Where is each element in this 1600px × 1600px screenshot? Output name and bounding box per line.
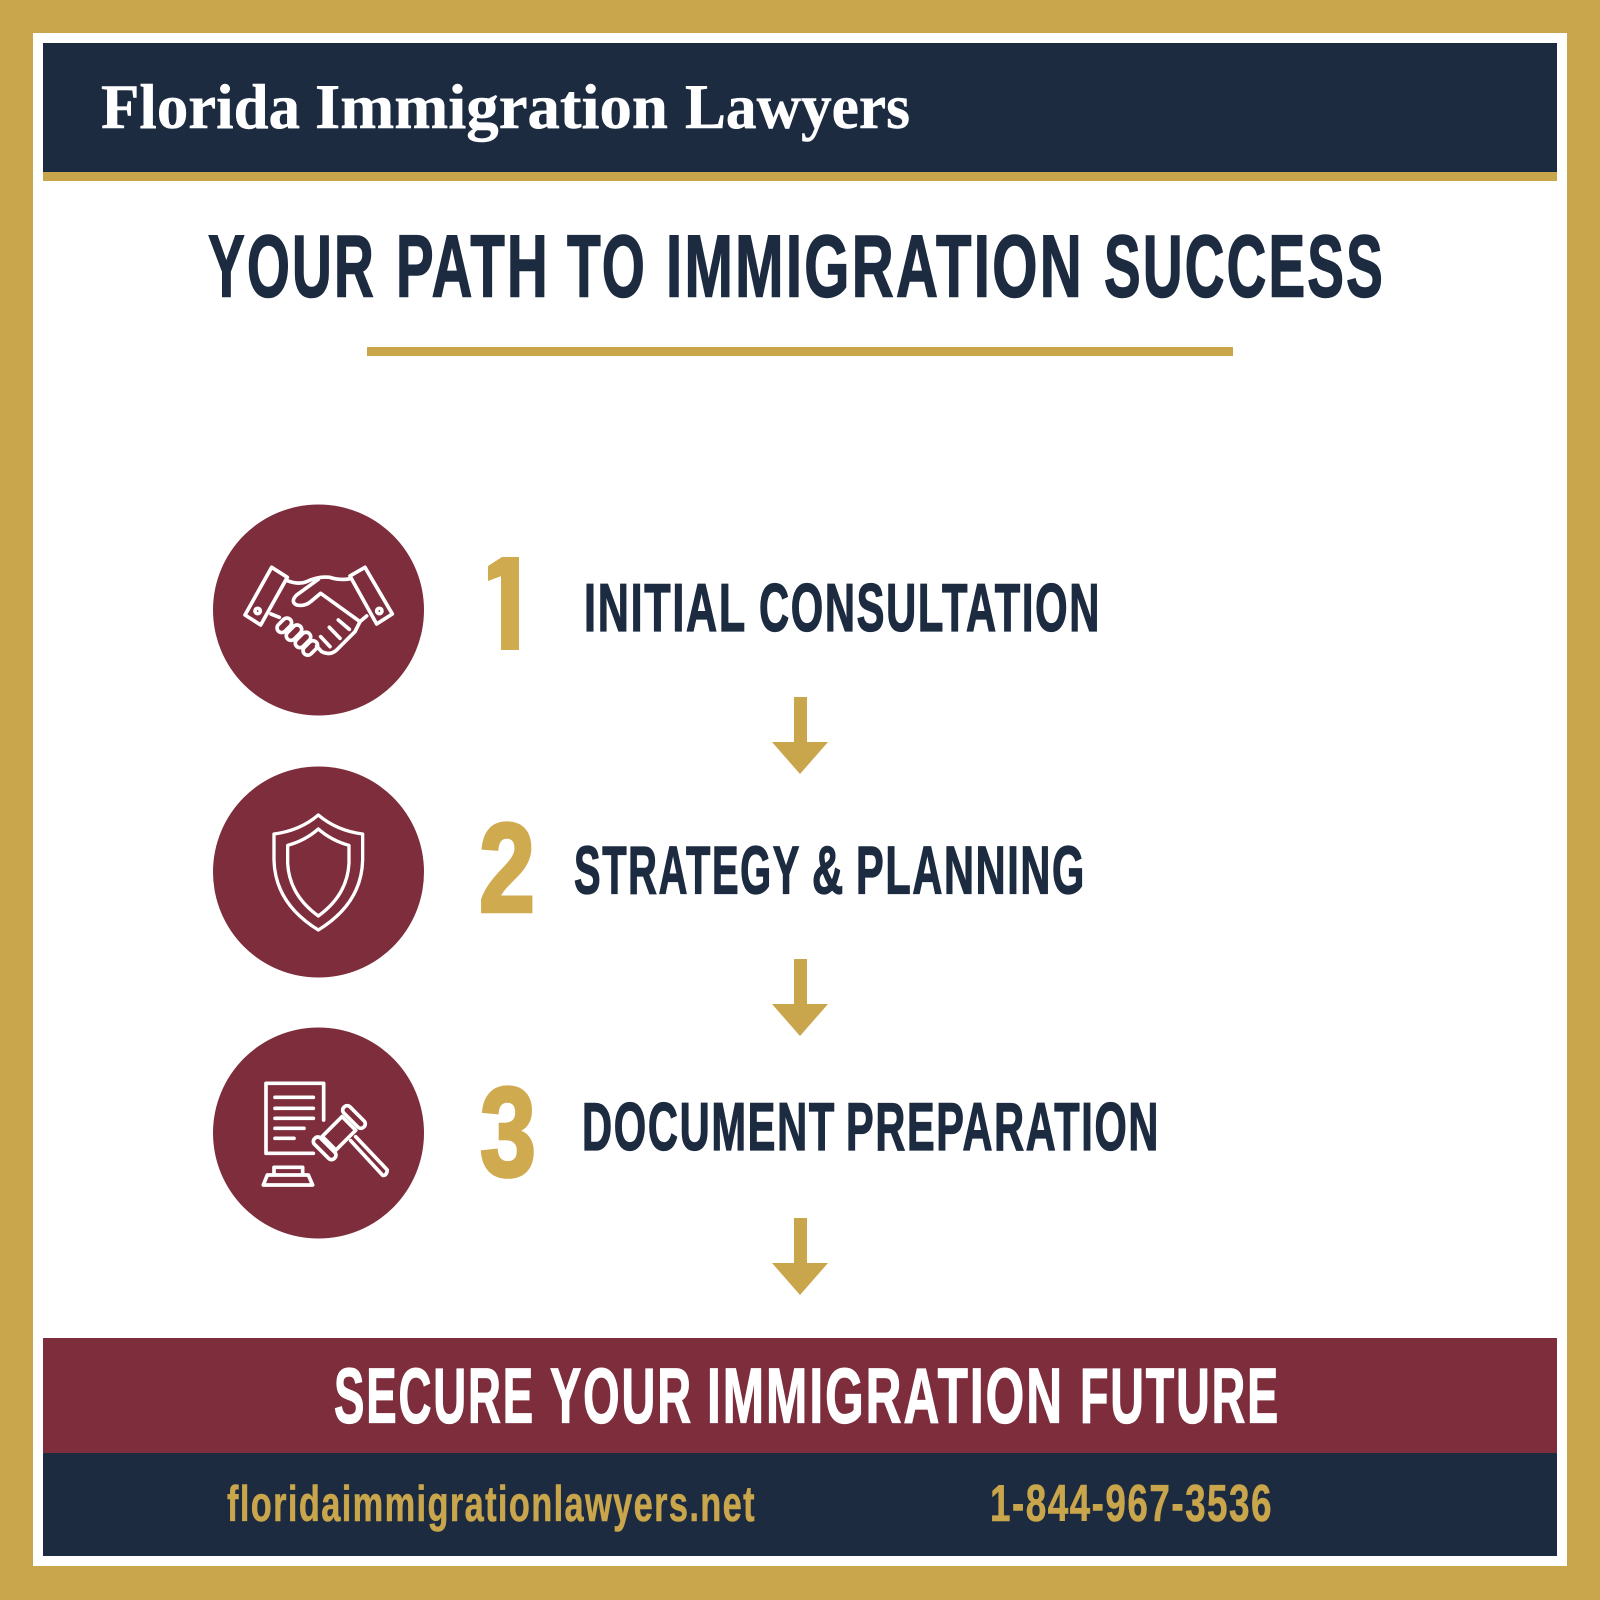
number 1: 1	[486, 534, 522, 676]
title: TO	[567, 216, 647, 316]
firm name: Immigration	[315, 71, 668, 142]
title	[208, 216, 1385, 316]
number 3: 3	[480, 1062, 536, 1202]
call to action banner	[43, 1338, 1557, 1453]
label 3: DOCUMENT	[582, 1089, 836, 1165]
banner text: FUTURE	[1080, 1352, 1280, 1440]
banner text: YOUR	[550, 1352, 693, 1440]
title: PATH	[396, 216, 550, 316]
arrow 2	[772, 959, 828, 1036]
label 2: PLANNING	[856, 832, 1086, 908]
label 1	[584, 570, 1101, 646]
number 2: 2	[479, 798, 535, 938]
header bar	[43, 43, 1557, 181]
step 3	[213, 1028, 1160, 1238]
contact footer	[43, 1453, 1557, 1556]
label 2: STRATEGY	[574, 832, 801, 908]
label 1: INITIAL	[584, 570, 747, 646]
firm name	[101, 71, 910, 142]
firm name: Florida	[101, 71, 300, 142]
banner text: SECURE	[334, 1352, 535, 1440]
banner text: IMMIGRATION	[707, 1352, 1064, 1440]
banner text	[334, 1352, 1280, 1440]
icon: handshake	[213, 504, 424, 716]
title underline	[367, 347, 1233, 356]
icon: document and gavel	[213, 1028, 424, 1238]
title: SUCCESS	[1104, 216, 1385, 316]
website: floridaimmigrationlawyers.net	[227, 1476, 756, 1532]
number 1	[488, 557, 519, 650]
title: YOUR	[208, 216, 376, 316]
firm name: Lawyers	[685, 71, 910, 142]
step 2	[213, 766, 1086, 978]
arrow 3	[772, 1218, 828, 1295]
step 1	[213, 504, 1101, 716]
label 2: &	[812, 832, 845, 908]
title: IMMIGRATION	[666, 216, 1084, 316]
label 1: CONSULTATION	[759, 570, 1101, 646]
phone: 1-844-967-3536	[990, 1475, 1273, 1533]
label 3: PREPARATION	[846, 1089, 1160, 1165]
arrow 1	[772, 697, 828, 774]
icon: shield	[213, 766, 424, 978]
